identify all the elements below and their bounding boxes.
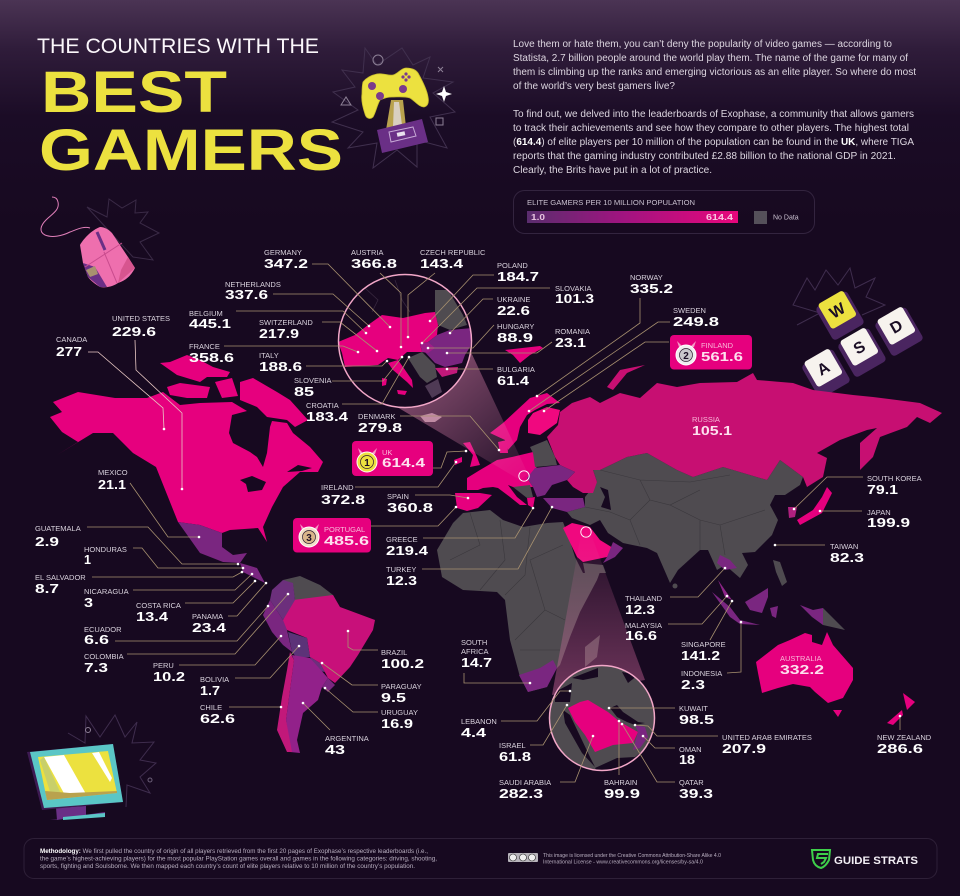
label: Spain: SPAIN (387, 492, 409, 501)
label: Croatia (306, 356, 410, 424)
Borneo (745, 588, 768, 613)
methodology text: Methodology: We first pulled the country of origin of all players retrieved from the first 20 pages of Exophase’s respective leaderboards (i.e., (40, 849, 428, 855)
magnifier: Europe (338, 274, 472, 408)
label: Greece (386, 507, 534, 558)
callout: Finland rank 2: 561.6 (701, 350, 743, 364)
label: Uruguay: URUGUAY (381, 708, 418, 717)
label: Mexico: 21.1 (98, 478, 126, 492)
label: Qatar: 39.3 (679, 787, 713, 801)
label: Austria: 366.8 (351, 257, 397, 271)
license text: International License - www.creativecommons.org/licenses/by-sa/4.0 (543, 860, 703, 866)
label: Israel: 61.8 (499, 750, 531, 764)
Tasmania (833, 710, 842, 717)
Caspian (600, 487, 611, 510)
label: South Africa (461, 638, 531, 684)
label: Peru: 10.2 (153, 670, 185, 684)
label: Hungary: HUNGARY (497, 322, 534, 331)
callout: UK rank 1 (352, 441, 467, 476)
label: Ecuador (84, 605, 269, 647)
label: Guatemala (35, 524, 239, 565)
label: United States: UNITED STATES (112, 314, 170, 323)
label: Hungary: 88.9 (497, 331, 533, 345)
label: Argentina (302, 702, 369, 757)
label: Singapore (681, 600, 733, 663)
label: Slovakia: 101.3 (555, 292, 594, 306)
label: Lebanon: 4.4 (461, 726, 486, 740)
label: Colombia: COLOMBIA (84, 652, 124, 661)
marker: Europe (519, 471, 529, 481)
license text: This image is licensed under the Creative Commons Attribution-Share Alike 4.0 (543, 853, 721, 859)
label: Ukraine: 22.6 (497, 304, 530, 318)
intro text: Clearly, the Brits have put in a lot of practice. (513, 165, 712, 176)
label: Ireland: 372.8 (321, 493, 365, 507)
label: Kuwait: KUWAIT (679, 704, 708, 713)
label: Denmark: DENMARK (358, 412, 396, 421)
label: Panama (192, 582, 267, 635)
Ukraine and Romania (527, 465, 575, 497)
label: Colombia (84, 593, 289, 675)
label: Paraguay (321, 662, 422, 705)
intro text: them is climbing up the ranks and emerging victorious as an elite player. So where do most (513, 67, 916, 78)
callout: UK rank 1: 1 (364, 458, 370, 469)
Central America (240, 563, 265, 583)
label: Kuwait: 98.5 (679, 713, 714, 727)
label: Nicaragua: NICARAGUA (84, 587, 129, 596)
label: Bahrain (604, 720, 640, 801)
label: Belgium: BELGIUM (189, 309, 223, 318)
label: Italy: 188.6 (259, 360, 302, 374)
label: Japan: 199.9 (867, 516, 910, 530)
intro text: Statista, 2.7 billion people around the world play them. The name of the game for many of (513, 53, 908, 64)
label: Poland: 184.7 (497, 270, 539, 284)
intro text: (614.4) of elite players per 10 million of the population can be found in the UK, where TIGA (513, 137, 914, 148)
label: Australia (780, 654, 824, 677)
label: El Salvador: 8.7 (35, 582, 59, 596)
label: Indonesia: 2.3 (681, 678, 705, 692)
methodology text: the game’s highest-achieving players) for the most popular PlayStation games overall and games in the following categories: driving, shooting, (40, 856, 437, 862)
label: Lebanon: LEBANON (461, 717, 497, 726)
legend (514, 190, 814, 234)
callout: UK rank 1: 614.4 (382, 456, 425, 470)
label: Brazil: BRAZIL (381, 648, 407, 657)
label: Malaysia: MALAYSIA (625, 621, 662, 630)
Mexico (178, 522, 247, 563)
label: Czech Republic (407, 248, 486, 338)
logo: Guide Strats: GUIDE STRATS (834, 855, 918, 867)
label: Argentina: ARGENTINA (325, 734, 369, 743)
label: United Arab Emirates: UNITED ARAB EMIRATES (722, 733, 812, 742)
label: Oman: 18 (679, 753, 695, 767)
South Africa (519, 660, 557, 692)
Svalbard (505, 346, 543, 363)
label: Costa Rica: COSTA RICA (136, 601, 181, 610)
label: Honduras (84, 545, 244, 569)
label: Israel (499, 704, 568, 764)
label: Slovenia: 85 (294, 385, 314, 399)
label: Saudi Arabia: 282.3 (499, 787, 543, 801)
label: Belgium (189, 309, 367, 334)
label: Paraguay: 9.5 (381, 691, 406, 705)
UAE and Oman (603, 542, 623, 563)
Sumatra and Java (712, 592, 760, 625)
label: Spain (387, 492, 469, 515)
label: Bolivia: 1.7 (200, 684, 220, 698)
Great Lakes (240, 476, 266, 492)
label: Israel: ISRAEL (499, 741, 526, 750)
Brazil (282, 595, 375, 683)
label: Peru (153, 635, 282, 684)
label: Slovenia: SLOVENIA (294, 376, 332, 385)
Spain and Portugal (455, 493, 492, 511)
intro text: reports that the gaming industry contributed £2.88 billion to the national GDP in 2021. (513, 151, 896, 162)
label: Norway: 335.2 (630, 282, 673, 296)
label: Belgium: 445.1 (189, 317, 231, 331)
label: Panama: 23.4 (192, 621, 226, 635)
logo: Guide Strats (812, 850, 918, 868)
Thailand (717, 555, 737, 570)
icon: WASD keys: S (851, 338, 869, 358)
title: THE COUNTRIES WITH THE (37, 35, 319, 58)
Uruguay (322, 678, 335, 692)
label: Chile: 62.6 (200, 712, 235, 726)
label: Malaysia: 16.6 (625, 629, 657, 643)
label: Netherlands: NETHERLANDS (225, 280, 281, 289)
label: Brazil: 100.2 (381, 657, 424, 671)
label: Saudi Arabia (499, 735, 594, 801)
label: Japan: JAPAN (867, 508, 891, 517)
label: Turkey (386, 506, 553, 588)
label: Mexico: MEXICO (98, 468, 128, 477)
New Guinea (800, 605, 823, 625)
label: Austria: AUSTRIA (351, 248, 384, 257)
callout: Portugal rank 3: 3 (306, 533, 312, 544)
label: El Salvador: EL SALVADOR (35, 573, 86, 582)
label: Germany (264, 248, 391, 328)
label: United Arab Emirates (634, 724, 812, 756)
label: Ecuador: 6.6 (84, 633, 109, 647)
label: Kuwait (608, 704, 714, 727)
label: Slovakia: SLOVAKIA (555, 284, 592, 293)
label: Austria (351, 248, 402, 348)
label: France (189, 342, 359, 365)
label: Czech Republic: 143.4 (420, 257, 463, 271)
icon: monitor (27, 715, 156, 820)
South Korea (788, 507, 797, 518)
intro text: of the world’s very best gamers live? (513, 81, 675, 92)
legend: No Data (773, 214, 799, 222)
label: Panama: PANAMA (192, 612, 223, 621)
label: Lebanon (461, 690, 571, 740)
label: Bahrain: BAHRAIN (604, 778, 637, 787)
label: Norway (536, 273, 673, 397)
label: Denmark (358, 412, 500, 451)
Colombia (270, 580, 295, 620)
label: Bahrain: 99.9 (604, 787, 640, 801)
label: Sweden: SWEDEN (673, 306, 706, 315)
Greece (527, 497, 535, 508)
Ireland (454, 457, 462, 465)
label: Greece: 219.4 (386, 544, 428, 558)
title: BEST (41, 60, 227, 125)
legend: 1.0 (531, 213, 546, 222)
label: Singapore: 141.2 (681, 649, 720, 663)
label: Sweden (528, 306, 719, 412)
label: New Zealand (877, 715, 932, 756)
label: Guatemala: GUATEMALA (35, 524, 81, 533)
Western Europe (467, 452, 537, 505)
Peru and Ecuador (263, 600, 292, 652)
Arctic islands (160, 355, 230, 382)
icon: WASD keys (793, 268, 924, 399)
Bolivia (288, 632, 310, 658)
label: Romania (446, 327, 590, 354)
label: Denmark: 279.8 (358, 421, 402, 435)
label: Australia: AUSTRALIA (780, 654, 822, 663)
label: South Korea: 79.1 (867, 483, 898, 497)
Gulf of St Lawrence (287, 465, 312, 472)
label: Taiwan: TAIWAN (830, 542, 858, 551)
label: Peru: PERU (153, 661, 174, 670)
label: Hungary (427, 322, 534, 349)
Chile (277, 652, 294, 752)
Turkey (543, 498, 585, 512)
label: Thailand: THAILAND (625, 594, 663, 603)
Sri Lanka (672, 584, 678, 588)
label: South Korea: SOUTH KOREA (867, 474, 922, 483)
label: United States: 229.6 (112, 325, 156, 339)
label: Japan (819, 508, 910, 530)
label: Honduras: HONDURAS (84, 545, 127, 554)
intro text: To find out, we delved into the leaderboards of Exophase, a community that allows gamers (513, 109, 914, 120)
callout: Portugal rank 3 (293, 506, 457, 552)
legend: 614.4 (706, 213, 734, 222)
callout: Finland rank 2: 2 (683, 351, 689, 362)
label: South Africa: 14.7 (461, 656, 492, 670)
Africa (437, 510, 600, 692)
label: Thailand: 12.3 (625, 603, 655, 617)
Saudi Arabia (563, 523, 613, 562)
Malaysia (718, 580, 732, 600)
label: Italy (259, 351, 388, 374)
label: Nicaragua (84, 573, 253, 610)
label: Nicaragua: 3 (84, 596, 93, 610)
label: Ukraine: UKRAINE (497, 295, 530, 304)
label: Indonesia: INDONESIA (681, 669, 722, 678)
Belarus (530, 440, 557, 467)
label: Paraguay: PARAGUAY (381, 682, 422, 691)
label: Slovenia (294, 356, 403, 399)
label: South Korea (793, 474, 922, 510)
Yemen (583, 563, 606, 573)
label: Honduras: 1 (84, 553, 91, 567)
label: Ireland: IRELAND (321, 483, 354, 492)
methodology text (40, 849, 437, 870)
Russia (547, 373, 942, 493)
icon: gaming mouse (41, 197, 159, 287)
New Zealand (903, 693, 915, 710)
world map (50, 346, 942, 753)
label: Sweden: 249.8 (673, 315, 719, 329)
label: United Arab Emirates: 207.9 (722, 742, 766, 756)
title: GAMERS (39, 118, 343, 183)
label: Canada: CANADA (56, 335, 87, 344)
callout: Portugal rank 3: 485.6 (324, 534, 369, 548)
Australia (756, 632, 853, 703)
label: Czech Republic: CZECH REPUBLIC (420, 248, 486, 257)
Paraguay (310, 657, 325, 672)
label: Netherlands: 337.6 (225, 288, 268, 302)
wedge: Middle East zoom (552, 534, 645, 695)
Norway and Sweden (490, 393, 560, 450)
magnifier: Middle East (550, 666, 660, 773)
label: Costa Rica (136, 580, 256, 624)
label: Slovakia (421, 284, 594, 344)
label: Guatemala: 2.9 (35, 535, 59, 549)
callout: Portugal rank 3: PORTUGAL (324, 525, 365, 534)
label: South Africa: AFRICA (461, 647, 489, 656)
label: Uruguay (324, 687, 418, 731)
label: Canada (56, 335, 165, 430)
label: Qatar (621, 723, 713, 801)
North America (50, 392, 323, 542)
label: Oman (642, 735, 702, 767)
icon: WASD keys: A (814, 359, 833, 380)
footer panel (24, 838, 937, 878)
label: Poland (429, 261, 539, 322)
label: Chile (200, 703, 282, 726)
label: Germany: GERMANY (264, 248, 302, 257)
label: Russia (692, 415, 732, 438)
callout: UK rank 1: UK (382, 448, 392, 457)
label: Switzerland: SWITZERLAND (259, 318, 313, 327)
Asia no-data (567, 453, 803, 583)
label: Bulgaria: BULGARIA (497, 365, 535, 374)
label: Croatia: 183.4 (306, 410, 348, 424)
Madagascar (585, 635, 600, 667)
label: New Zealand: 286.6 (877, 742, 923, 756)
label: Argentina: 43 (325, 743, 345, 757)
label: Switzerland: 217.9 (259, 327, 299, 341)
Japan (797, 487, 832, 525)
label: Thailand (625, 567, 726, 617)
label: Taiwan: 82.3 (830, 551, 864, 565)
creative commons badge (508, 853, 538, 862)
label: Spain: 360.8 (387, 501, 433, 515)
label: Ecuador: ECUADOR (84, 625, 122, 634)
label: Bulgaria: 61.4 (497, 374, 529, 388)
label: France: FRANCE (189, 342, 220, 351)
label: Romania: ROMANIA (555, 327, 590, 336)
methodology text: sports, fighting and Soulsborne. We then mapped each country’s count of elite players relative to 10 million of the country’s population. (40, 864, 415, 870)
Iceland (420, 413, 442, 422)
label: Romania: 23.1 (555, 336, 586, 350)
icon: trophy controller (332, 48, 455, 168)
label: Greece: GREECE (386, 535, 418, 544)
label: Indonesia (681, 621, 742, 692)
label: Turkey: 12.3 (386, 574, 417, 588)
label: Oman: OMAN (679, 745, 702, 754)
label: Colombia: 7.3 (84, 661, 108, 675)
license text (543, 853, 721, 866)
Novaya Zemlya (607, 365, 645, 390)
intro text: Love them or hate them, you can’t deny the popularity of video games — according to (513, 39, 892, 50)
Denmark (498, 440, 508, 453)
Philippines (773, 560, 787, 586)
label: Turkey: TURKEY (386, 565, 416, 574)
label: El Salvador (35, 571, 243, 596)
label: Ukraine (449, 295, 530, 334)
legend: ELITE GAMERS PER 10 MILLION POPULATION (527, 198, 695, 207)
label: Saudi Arabia: SAUDI ARABIA (499, 778, 551, 787)
label: Singapore: SINGAPORE (681, 640, 726, 649)
marker: Middle East (581, 527, 591, 537)
Argentina (286, 655, 328, 753)
label: Germany: 347.2 (264, 257, 308, 271)
label: South Africa: SOUTH (461, 638, 487, 647)
label: Netherlands (225, 280, 370, 327)
label: Norway: NORWAY (630, 273, 663, 282)
label: Qatar: QATAR (679, 778, 704, 787)
label: New Zealand: NEW ZEALAND (877, 733, 932, 742)
label: Italy: ITALY (259, 351, 279, 360)
label: Poland: POLAND (497, 261, 528, 270)
callout: Finland rank 2: FINLAND (701, 341, 734, 350)
label: Chile: CHILE (200, 703, 222, 712)
label: Malaysia (625, 595, 728, 643)
label: Croatia: CROATIA (306, 401, 339, 410)
label: Switzerland (259, 318, 378, 352)
intro text (513, 39, 916, 176)
Balkans (513, 485, 533, 498)
label: France: 358.6 (189, 351, 234, 365)
label: Russia: RUSSIA (692, 415, 720, 424)
label: Taiwan (774, 542, 864, 565)
Sulawesi (770, 606, 778, 618)
label: United States (112, 314, 183, 490)
wedge: Europe zoom (397, 350, 528, 480)
icon: WASD keys: W (827, 300, 849, 322)
Finland (528, 407, 560, 435)
label: Bolivia: BOLIVIA (200, 675, 229, 684)
label: Mexico (98, 468, 200, 538)
label: Uruguay: 16.9 (381, 717, 413, 731)
UK (463, 442, 480, 467)
label: Bulgaria (446, 365, 535, 388)
intro text: to track their achievements and see how they compare to other players. The highest total (513, 123, 909, 134)
South America gray north (283, 576, 340, 608)
label: Russia: 105.1 (692, 424, 732, 438)
title (37, 35, 343, 183)
label: Ireland (321, 461, 457, 507)
label: Australia: 332.2 (780, 663, 824, 677)
label: Bolivia (200, 645, 300, 698)
callout: Finland rank 2 (543, 335, 752, 412)
label: Costa Rica: 13.4 (136, 610, 168, 624)
label: Canada: 277 (56, 345, 82, 359)
icon: WASD keys: D (887, 317, 906, 338)
label: Brazil (347, 630, 424, 671)
